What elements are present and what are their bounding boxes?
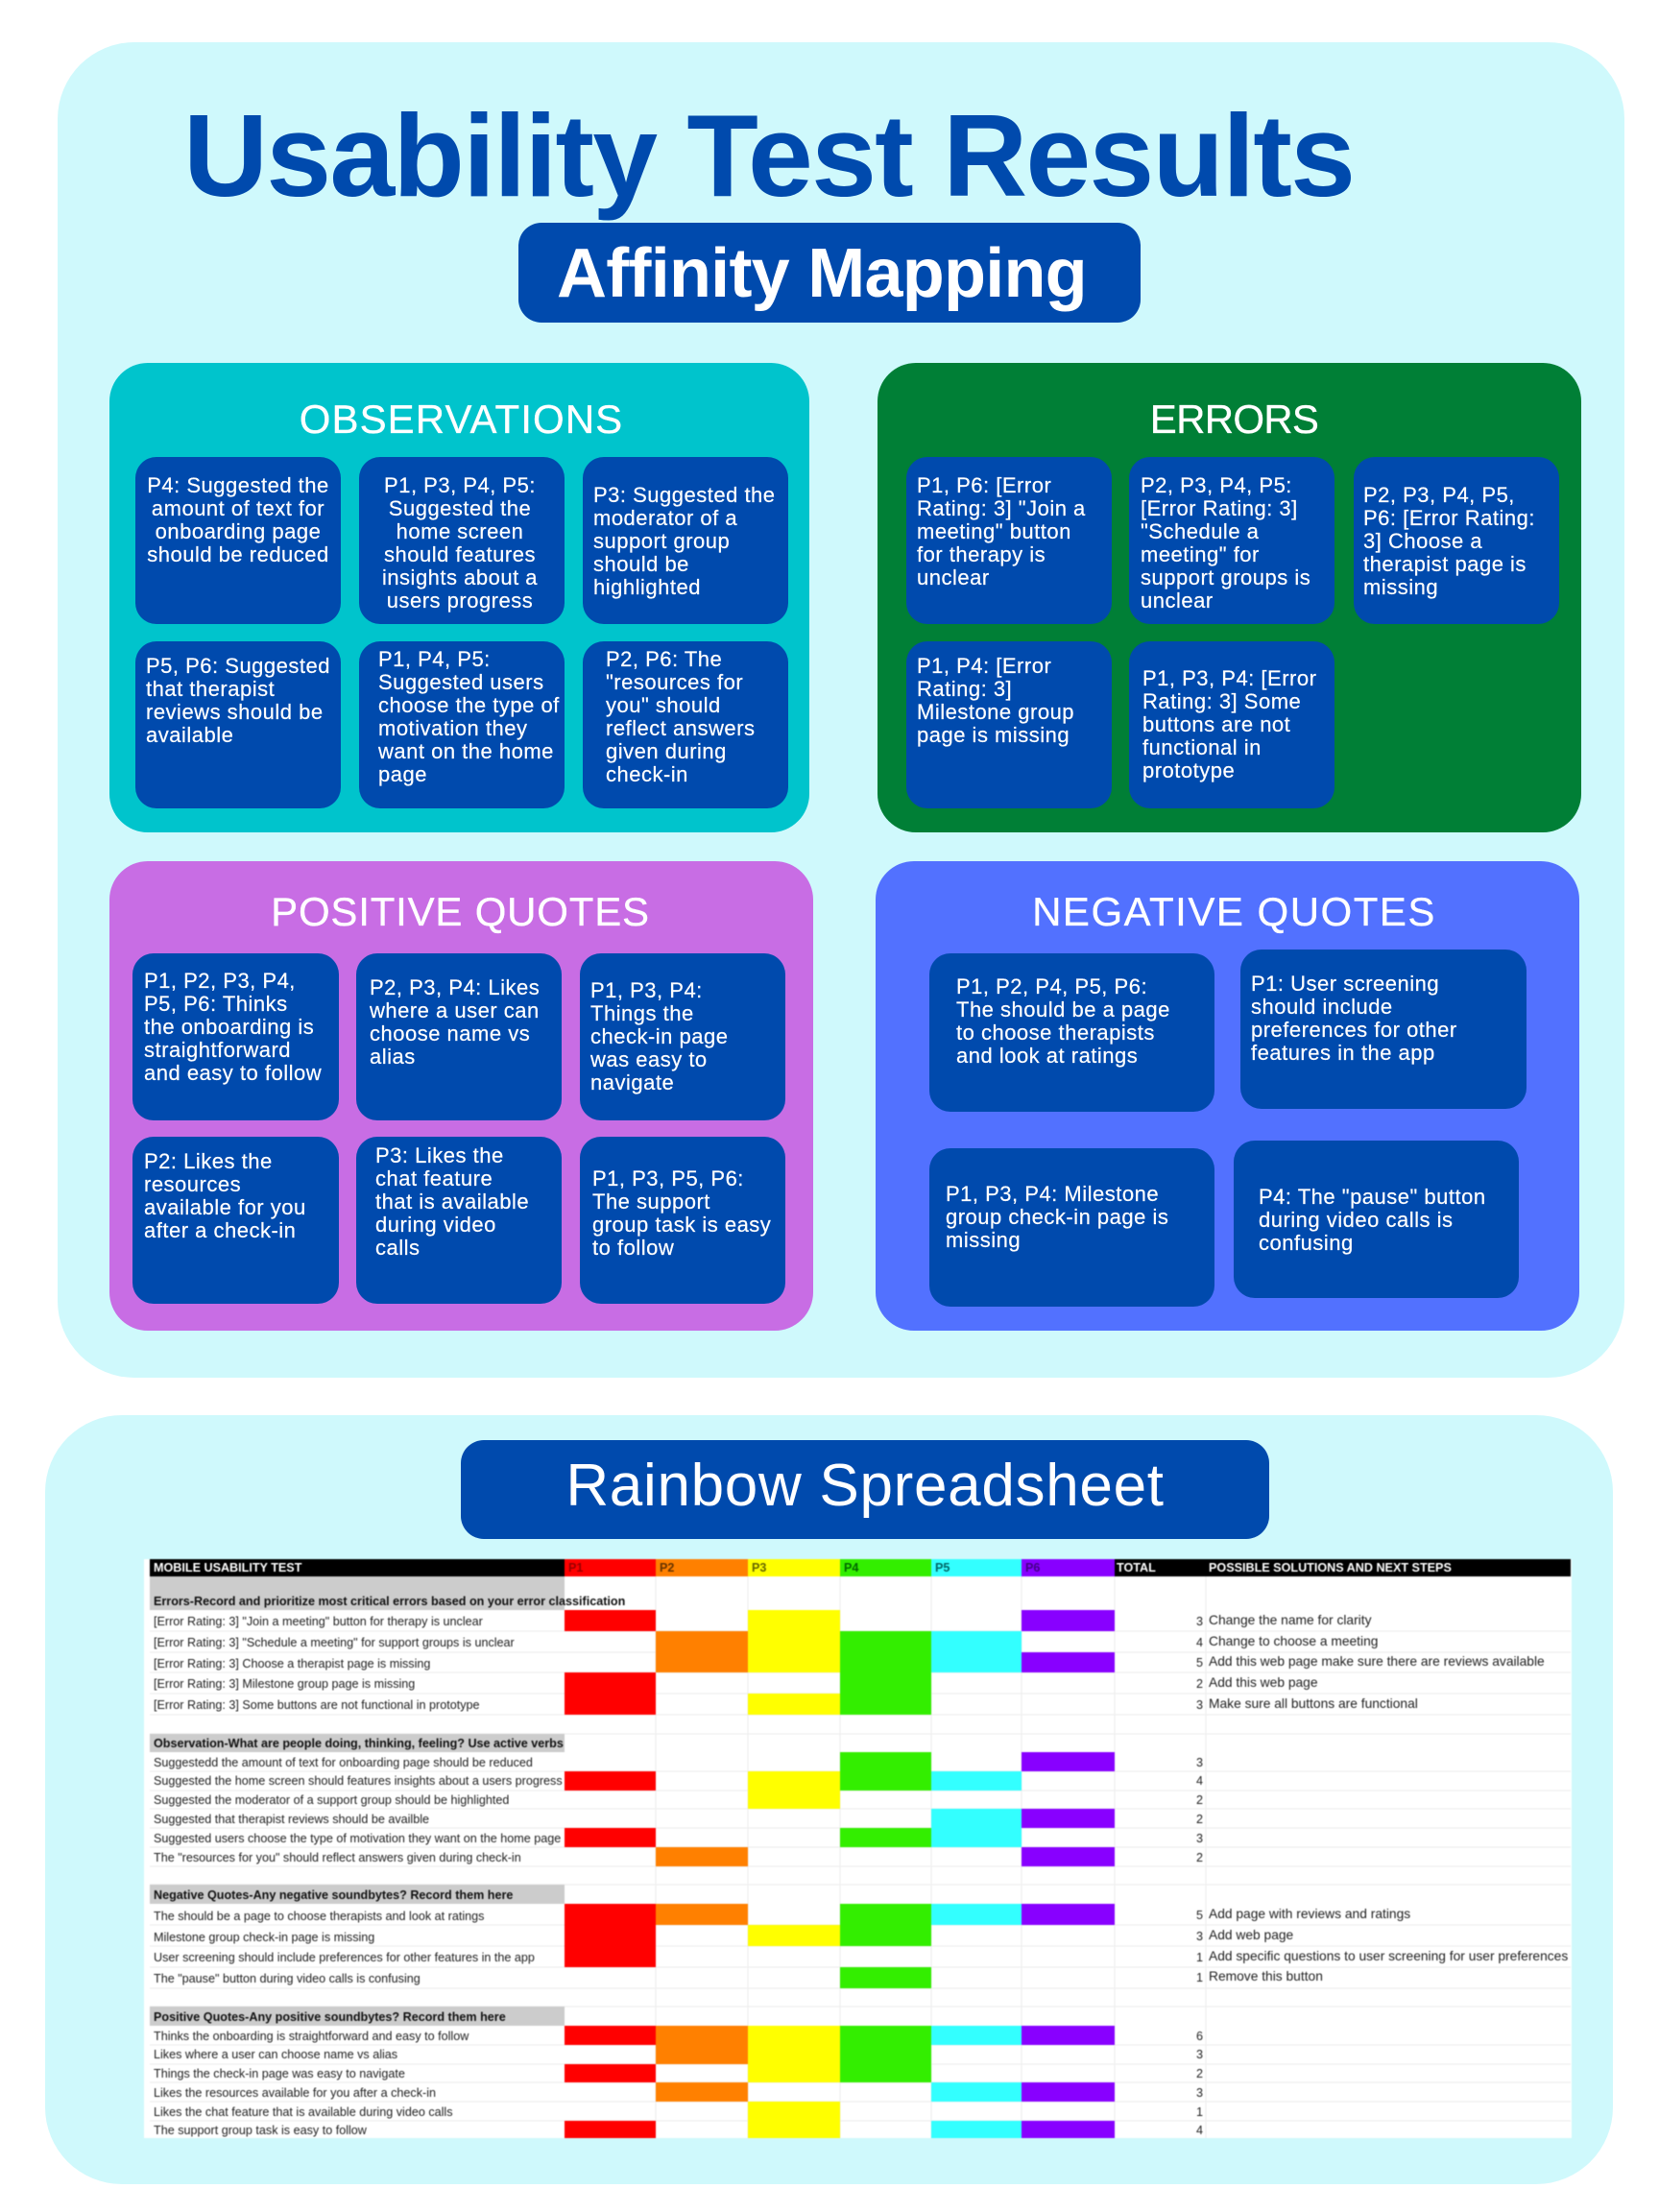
section: positive quote rows: 4 (1196, 2124, 1203, 2137)
spreadsheet header row (150, 1559, 1571, 1576)
card: onboarding: and easy to follow (144, 1061, 322, 1085)
card: buttons not functional: P1, P3, P4: [Error (1142, 666, 1316, 690)
card: schedule a meeting (1129, 457, 1334, 624)
section: negative quote rows: Add page with reviews and ratings (1209, 1907, 1410, 1921)
section: errors rows: [Error Rating: 3] Choose a therapist page is missing (154, 1657, 430, 1671)
card: onboarding: P5, P6: Thinks (144, 992, 288, 1016)
panel: observations (109, 363, 809, 832)
spreadsheet header row: P4 (844, 1561, 858, 1575)
card: choose a therapist: missing (1363, 575, 1438, 599)
card: pause button: P4: The "pause" button (1259, 1185, 1486, 1209)
section: observation rows: 2 (1196, 1813, 1203, 1826)
card: home screen insights: users progress (387, 589, 533, 613)
card: user screening: preferences for other (1251, 1018, 1457, 1042)
section: positive quote rows: Thinks the onboarding is straightforward and easy to follow (154, 2030, 469, 2043)
card: choose a therapist: 3] Choose a (1363, 529, 1482, 553)
section: positive quote rows: 1 (1196, 2105, 1203, 2119)
card: check-in page (580, 953, 785, 1120)
card: resources: resources (144, 1172, 241, 1196)
heading: negative quotes: NEGATIVE QUOTES (1032, 889, 1436, 934)
section: errors rows: 3 (1196, 1615, 1203, 1628)
card: resources for you: given during (606, 739, 727, 763)
card: choose therapists: and look at ratings (956, 1044, 1138, 1068)
card: resources for you: "resources for (606, 670, 743, 694)
card: therapist reviews: that therapist (146, 677, 275, 701)
card: resources for you (583, 641, 788, 808)
card: pause button (1234, 1141, 1519, 1298)
card: name vs alias: where a user can (370, 998, 540, 1022)
heading: errors: ERRORS (1150, 397, 1318, 442)
card: buttons not functional: Rating: 3] Some (1142, 689, 1301, 713)
card: moderator: P3: Suggested the (593, 483, 776, 507)
spreadsheet header row: P1 (568, 1561, 583, 1575)
card: motivation (359, 641, 565, 808)
card: chat feature: during video (375, 1213, 496, 1237)
card: resources for you: check-in (606, 762, 688, 786)
card: join a meeting: P1, P6: [Error (917, 473, 1051, 497)
spreadsheet header row: P5 (935, 1561, 950, 1575)
card: milestone check-in (929, 1148, 1214, 1307)
card: resources: after a check-in (144, 1218, 296, 1242)
card: onboarding (132, 953, 339, 1120)
card: moderator: support group (593, 529, 730, 553)
section: positive quote rows: Likes the resources available for you after a check-in (154, 2086, 436, 2100)
card: user screening (1240, 950, 1527, 1109)
subtitle pill: Affinity Mapping (518, 223, 1141, 323)
section: errors rows: Change the name for clarity (1209, 1613, 1372, 1627)
card: therapist reviews: P5, P6: Suggested (146, 654, 330, 678)
card: support group task: group task is easy (592, 1213, 771, 1237)
section: observation rows (150, 1734, 1203, 1866)
card: home screen insights: insights about a (382, 565, 538, 589)
card: milestone group (906, 641, 1112, 808)
card: support group task: The support (592, 1190, 710, 1214)
card: name vs alias (356, 953, 562, 1120)
card: moderator: should be (593, 552, 689, 576)
section: observation rows: 2 (1196, 1793, 1203, 1807)
card: schedule a meeting: unclear (1141, 589, 1214, 613)
card: milestone check-in: P1, P3, P4: Milestone (946, 1182, 1159, 1206)
card: resources: available for you (144, 1195, 306, 1219)
card: check-in page: Things the (590, 1001, 694, 1025)
card: milestone check-in: missing (946, 1228, 1021, 1252)
card: motivation: want on the home (378, 739, 554, 763)
card: choose therapists (929, 953, 1214, 1112)
card: motivation: Suggested users (378, 670, 544, 694)
section: observation rows: Suggested the home screen should features insights about a users progress (154, 1774, 563, 1788)
panel: rainbow spreadsheet background (45, 1415, 1613, 2184)
card: home screen insights: should features (384, 542, 536, 566)
panel: affinity mapping background (58, 42, 1624, 1378)
card: pause button: confusing (1259, 1231, 1354, 1255)
card: resources (132, 1137, 339, 1304)
card: milestone group: page is missing (917, 723, 1070, 747)
section: positive quote rows (150, 2007, 1203, 2138)
section: observation rows: 4 (1196, 1774, 1203, 1788)
card: resources for you: P2, P6: The (606, 647, 722, 671)
card: home screen insights (359, 457, 565, 624)
card: join a meeting (906, 457, 1112, 624)
section: negative quote rows (150, 1885, 1568, 1988)
section: positive quote rows: 3 (1196, 2086, 1203, 2100)
card: choose a therapist: P6: [Error Rating: (1363, 506, 1535, 530)
section: positive quote rows: The support group task is easy to follow (154, 2124, 368, 2137)
section: observation rows: The "resources for you" should reflect answers given during check-in (154, 1851, 521, 1864)
section: positive quote rows: 6 (1196, 2030, 1203, 2043)
card: schedule a meeting: P2, P3, P4, P5: (1141, 473, 1292, 497)
card: join a meeting: for therapy is (917, 542, 1046, 566)
card: choose a therapist (1354, 457, 1559, 624)
card: home screen insights: P1, P3, P4, P5: (384, 473, 536, 497)
card: choose therapists: P1, P2, P4, P5, P6: (956, 974, 1147, 998)
card: name vs alias: choose name vs (370, 1022, 530, 1046)
card: therapist reviews: reviews should be (146, 700, 324, 724)
card: choose therapists: The should be a page (956, 998, 1170, 1022)
section: errors rows: 5 (1196, 1656, 1203, 1670)
card: name vs alias: alias (370, 1045, 416, 1069)
card: join a meeting: unclear (917, 565, 990, 589)
card: buttons not functional: functional in (1142, 735, 1262, 759)
subtitle pill: Affinity Mapping: Affinity Mapping (557, 235, 1087, 312)
card: resources for you: reflect answers (606, 716, 755, 740)
card: chat feature: that is available (375, 1190, 529, 1214)
section: errors rows: [Error Rating: 3] Some buttons are not functional in prototype (154, 1698, 480, 1712)
card: chat feature: P3: Likes the (375, 1143, 504, 1167)
heading: positive quotes: POSITIVE QUOTES (271, 889, 650, 934)
heading: observations: OBSERVATIONS (300, 397, 623, 442)
card: milestone group: Rating: 3] (917, 677, 1012, 701)
card: schedule a meeting: meeting" for (1141, 542, 1260, 566)
card: onboarding: P1, P2, P3, P4, (144, 969, 296, 993)
card: milestone group: P1, P4: [Error (917, 654, 1051, 678)
section: observation rows: 3 (1196, 1756, 1203, 1769)
panel: negative quotes (876, 861, 1579, 1331)
spreadsheet header row: P2 (660, 1561, 674, 1575)
card: milestone group: Milestone group (917, 700, 1074, 724)
card: P4 text amount: onboarding page (156, 519, 321, 543)
spreadsheet header row: POSSIBLE SOLUTIONS AND NEXT STEPS (1209, 1561, 1452, 1575)
card: P4 text amount (135, 457, 341, 624)
card: schedule a meeting: support groups is (1141, 565, 1310, 589)
card: chat feature: calls (375, 1236, 421, 1260)
section: observation rows: 2 (1196, 1851, 1203, 1864)
card: check-in page: check-in page (590, 1024, 728, 1048)
card: P4 text amount: P4: Suggested the (147, 473, 329, 497)
card: home screen insights: Suggested the (389, 496, 531, 520)
card: support group task (580, 1137, 785, 1304)
card: resources: P2: Likes the (144, 1149, 273, 1173)
card: moderator: moderator of a (593, 506, 737, 530)
section: errors rows: 4 (1196, 1636, 1203, 1649)
section: negative quote rows: The should be a page to choose therapists and look at ratings (154, 1910, 484, 1923)
heading pill: Rainbow Spreadsheet: Rainbow Spreadsheet (565, 1453, 1165, 1519)
panel: positive quotes (109, 861, 813, 1331)
section: negative quote rows: Milestone group check-in page is missing (154, 1931, 374, 1944)
section: positive quote rows: Likes where a user can choose name vs alias (154, 2048, 397, 2061)
card: support group task: P1, P3, P5, P6: (592, 1166, 744, 1190)
card: chat feature (356, 1137, 562, 1304)
section: negative quote rows: 1 (1196, 1971, 1203, 1984)
section: positive quote rows: Likes the chat feature that is available during video calls (154, 2105, 453, 2119)
card: schedule a meeting: [Error Rating: 3] (1141, 496, 1298, 520)
card: user screening: features in the app (1251, 1041, 1435, 1065)
section: positive quote rows: 3 (1196, 2048, 1203, 2061)
card: motivation: motivation they (378, 716, 527, 740)
card: check-in page: P1, P3, P4: (590, 978, 703, 1002)
card: buttons not functional: prototype (1142, 758, 1235, 782)
card: schedule a meeting: "Schedule a (1141, 519, 1259, 543)
spreadsheet header row: P3 (752, 1561, 766, 1575)
section: errors rows: 3 (1196, 1698, 1203, 1712)
title: Usability Test Results (183, 90, 1354, 221)
card: choose therapists: to choose therapists (956, 1021, 1155, 1045)
card: chat feature: chat feature (375, 1166, 493, 1190)
section: observation rows: Suggested that therapist reviews should be availble (154, 1813, 429, 1826)
card: motivation: page (378, 762, 427, 786)
section: observation rows: 3 (1196, 1832, 1203, 1845)
card: therapist reviews: available (146, 723, 233, 747)
card: moderator: highlighted (593, 575, 701, 599)
section: negative quote rows: 1 (1196, 1951, 1203, 1964)
card: onboarding: straightforward (144, 1038, 291, 1062)
section: negative quote rows: The "pause" button during video calls is confusing (154, 1972, 421, 1985)
card: therapist reviews (135, 641, 341, 808)
card: resources for you: you" should (606, 693, 721, 717)
section: negative quote rows: Add specific questions to user screening for user preferences (1209, 1949, 1568, 1963)
card: support group task: to follow (592, 1236, 674, 1260)
section: negative quote rows: Negative Quotes-Any negative soundbytes? Record them here (154, 1888, 513, 1902)
section: errors rows: Errors-Record and prioritize most critical errors based on your error classification (154, 1595, 625, 1608)
section: errors rows: Add this web page make sure there are reviews available (1209, 1654, 1545, 1669)
heading pill: Rainbow Spreadsheet (461, 1440, 1269, 1539)
section: errors rows: 2 (1196, 1677, 1203, 1691)
card: check-in page: was easy to (590, 1047, 708, 1071)
spreadsheet header row: P6 (1025, 1561, 1040, 1575)
panel: errors (878, 363, 1581, 832)
card: user screening: P1: User screening (1251, 972, 1439, 996)
section: negative quote rows: Remove this button (1209, 1969, 1323, 1984)
card: home screen insights: home screen (397, 519, 523, 543)
section: errors rows: [Error Rating: 3] "Schedule a meeting" for support groups is unclear (154, 1636, 515, 1649)
card: milestone check-in: group check-in page is (946, 1205, 1168, 1229)
spreadsheet header row: TOTAL (1117, 1561, 1156, 1575)
card: buttons not functional: buttons are not (1142, 712, 1290, 736)
card: check-in page: navigate (590, 1070, 674, 1094)
card: moderator (583, 457, 788, 624)
section: observation rows: Suggestedd the amount of text for onboarding page should be reduced (154, 1756, 533, 1769)
section: negative quote rows: 3 (1196, 1930, 1203, 1943)
card: name vs alias: P2, P3, P4: Likes (370, 975, 540, 999)
card: motivation: P1, P4, P5: (378, 647, 491, 671)
section: errors rows: Add this web page (1209, 1675, 1318, 1690)
section: errors rows: Make sure all buttons are functional (1209, 1696, 1418, 1711)
card: choose a therapist: P2, P3, P4, P5, (1363, 483, 1515, 507)
card: pause button: during video calls is (1259, 1208, 1453, 1232)
section: positive quote rows: Positive Quotes-Any positive soundbytes? Record them here (154, 2010, 506, 2024)
card: choose a therapist: therapist page is (1363, 552, 1527, 576)
section: observation rows: Suggested users choose the type of motivation they want on the home page (154, 1832, 561, 1845)
section: errors rows: Change to choose a meeting (1209, 1634, 1378, 1648)
section: observation rows: Observation-What are people doing, thinking, feeling? Use active verbs (154, 1737, 564, 1750)
section: positive quote rows: Things the check-in page was easy to navigate (154, 2067, 405, 2080)
card: join a meeting: Rating: 3] "Join a (917, 496, 1086, 520)
card: buttons not functional (1129, 641, 1334, 808)
section: errors rows (150, 1576, 1545, 1715)
section: negative quote rows: User screening should include preferences for other features in the app (154, 1951, 535, 1964)
spreadsheet header row: MOBILE USABILITY TEST (154, 1561, 302, 1575)
section: errors rows: [Error Rating: 3] Milestone group page is missing (154, 1677, 415, 1691)
card: P4 text amount: should be reduced (147, 542, 329, 566)
card: P4 text amount: amount of text for (152, 496, 325, 520)
card: user screening: should include (1251, 995, 1393, 1019)
section: errors rows: [Error Rating: 3] "Join a meeting" button for therapy is unclear (154, 1615, 483, 1628)
section: negative quote rows: 5 (1196, 1909, 1203, 1922)
section: observation rows: Suggested the moderator of a support group should be highlighted (154, 1793, 509, 1807)
card: motivation: choose the type of (378, 693, 560, 717)
card: onboarding: the onboarding is (144, 1015, 314, 1039)
section: positive quote rows: 2 (1196, 2067, 1203, 2080)
section: negative quote rows: Add web page (1209, 1928, 1294, 1942)
card: join a meeting: meeting" button (917, 519, 1071, 543)
